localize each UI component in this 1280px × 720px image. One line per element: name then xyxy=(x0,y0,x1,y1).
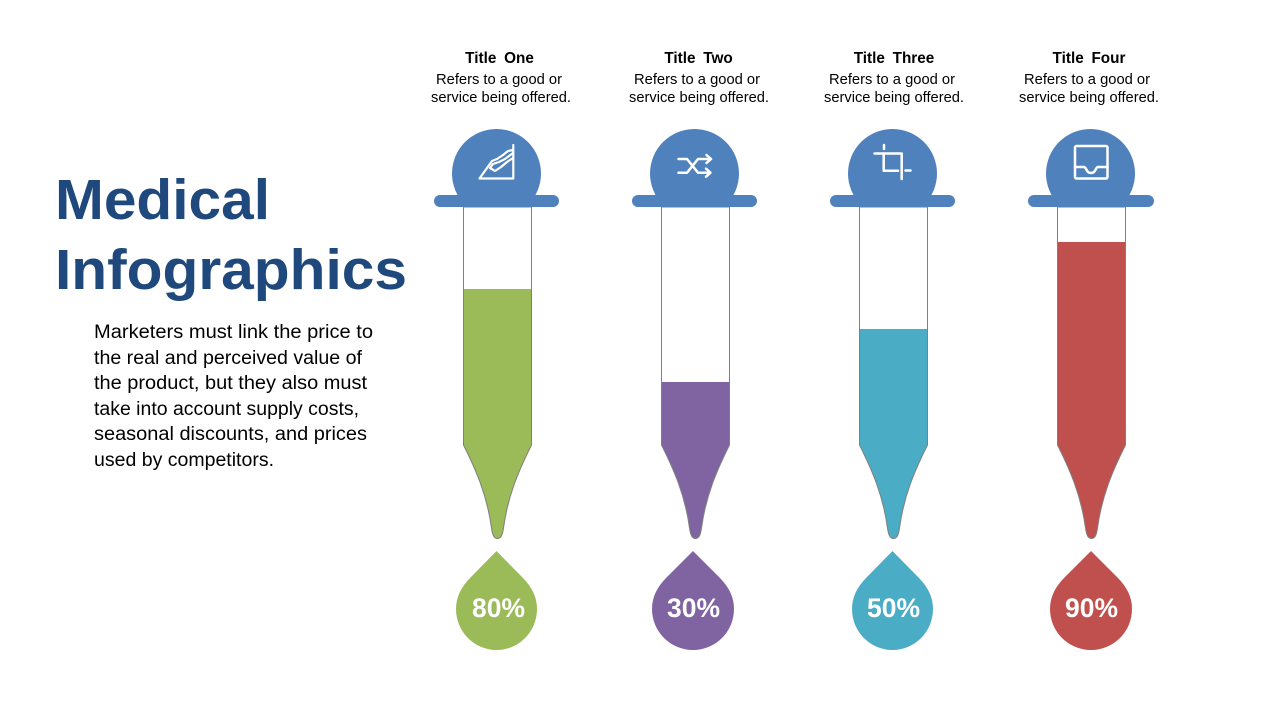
icon: area chart xyxy=(480,145,513,178)
heading: Title Three xyxy=(824,50,964,106)
body paragraph: take into account supply costs, xyxy=(94,399,359,420)
dropper bulb xyxy=(1028,129,1154,207)
heading: Title Four: Title Four xyxy=(1053,50,1125,67)
icon: crop xyxy=(874,145,910,179)
column 1: Title One, 80% xyxy=(431,50,571,650)
heading: Title Four: Refers to a good or xyxy=(1024,72,1150,88)
heading: Title Two: service being offered. xyxy=(629,90,769,106)
heading: Title One: Title One xyxy=(465,50,534,67)
heading: Title Two xyxy=(629,50,769,106)
body paragraph: Marketers must link the price to xyxy=(94,322,373,343)
heading: Title Four: service being offered. xyxy=(1019,90,1159,106)
dropper tube with 90% fill xyxy=(1058,207,1126,538)
value drop 80% xyxy=(456,551,537,650)
body paragraph: seasonal discounts, and prices xyxy=(94,424,367,445)
dropper bulb xyxy=(632,129,757,207)
body paragraph xyxy=(94,322,373,471)
heading: Title Three: Title Three xyxy=(854,50,934,67)
value drop 50%: 50% xyxy=(867,593,920,623)
value drop 30% xyxy=(652,551,734,650)
icon: inbox tray xyxy=(1075,146,1108,178)
value drop 50% xyxy=(852,551,933,650)
title: Infographics xyxy=(55,238,407,302)
column 3: Title Three, 50% xyxy=(824,50,964,650)
column 4: Title Four, 90% xyxy=(1019,50,1159,650)
heading: Title Two: Refers to a good or xyxy=(634,72,760,88)
heading: Title Three: service being offered. xyxy=(824,90,964,106)
dropper bulb xyxy=(830,129,955,207)
heading: Title Three: Refers to a good or xyxy=(829,72,955,88)
title: Medical xyxy=(55,168,270,232)
heading: Title Two: Title Two xyxy=(664,50,733,67)
title xyxy=(55,168,407,302)
value drop 80%: 80% xyxy=(472,593,525,623)
heading: Title One: service being offered. xyxy=(431,90,571,106)
value drop 90% xyxy=(1050,551,1132,650)
heading: Title One xyxy=(431,50,571,106)
dropper bulb xyxy=(434,129,559,207)
value drop 90%: 90% xyxy=(1065,593,1118,623)
column 2: Title Two, 30% xyxy=(629,50,769,650)
value drop 30%: 30% xyxy=(667,593,720,623)
body paragraph: used by competitors. xyxy=(94,450,274,471)
body paragraph: the real and perceived value of xyxy=(94,348,363,369)
heading: Title Four xyxy=(1019,50,1159,106)
body paragraph: the product, but they also must xyxy=(94,373,368,394)
dropper tube with 80% fill xyxy=(464,207,532,538)
dropper tube with 30% fill xyxy=(662,207,730,538)
heading: Title One: Refers to a good or xyxy=(436,72,562,88)
dropper tube with 50% fill xyxy=(860,207,928,538)
icon: shuffle xyxy=(678,155,711,177)
